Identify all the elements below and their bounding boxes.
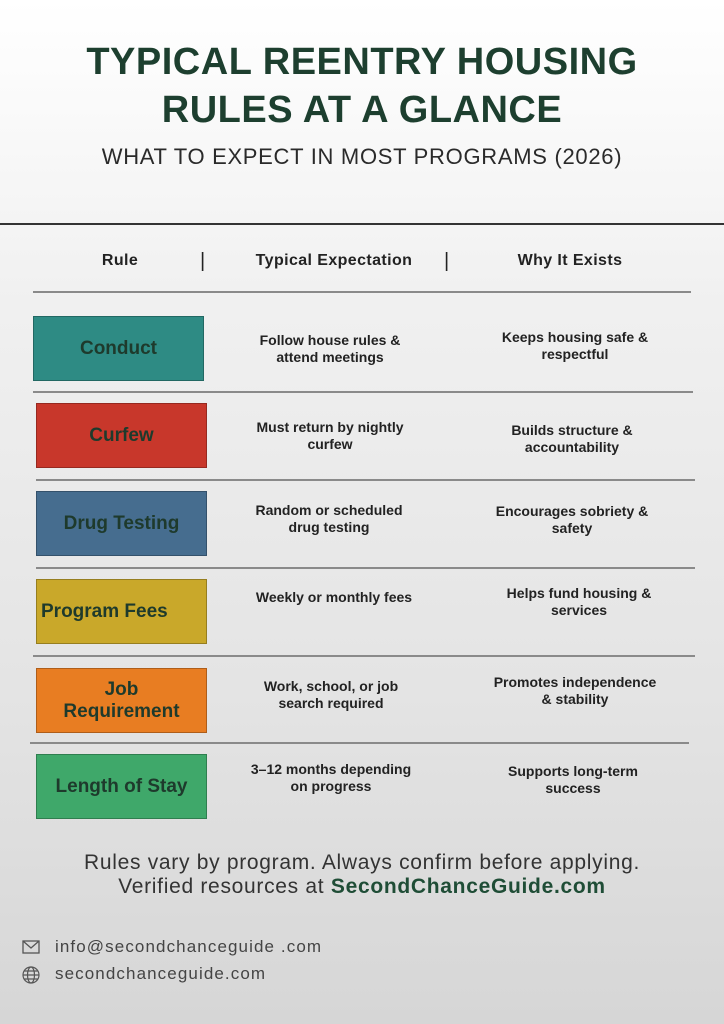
row: curfew: Curfew — [89, 424, 154, 446]
row: drug testing: safety — [552, 520, 592, 536]
title — [86, 41, 638, 131]
row: curfew — [36, 403, 633, 468]
row: length of stay: success — [545, 780, 601, 796]
table header: Why It Exists — [518, 252, 622, 269]
row: length of stay: Length of Stay — [56, 776, 187, 796]
title: TYPICAL REENTRY HOUSING — [86, 41, 638, 83]
footer note: Verified resources at SecondChanceGuide.com — [118, 875, 606, 898]
row: conduct — [33, 316, 648, 381]
row: length of stay: 3–12 months depending — [251, 761, 411, 777]
table header: | — [444, 250, 450, 272]
row: curfew: accountability — [525, 439, 619, 455]
row: program fees: Program Fees — [41, 600, 168, 622]
row: job requirement — [36, 668, 656, 733]
row: program fees: Weekly or monthly fees — [256, 589, 412, 605]
row: length of stay: on progress — [291, 778, 371, 794]
icon: envelope — [22, 940, 40, 954]
footer note: Rules vary by program. Always confirm before applying. — [84, 851, 640, 874]
table header: | — [200, 250, 206, 272]
row: program fees: services — [551, 602, 607, 618]
row: conduct: respectful — [542, 346, 608, 362]
row: conduct: Keeps housing safe & — [502, 329, 648, 345]
row: job requirement: Promotes independence — [494, 674, 656, 690]
row: curfew: Builds structure & — [511, 422, 633, 438]
row: drug testing: Encourages sobriety & — [496, 503, 648, 519]
row: program fees — [36, 579, 651, 644]
row: job requirement: & stability — [542, 691, 608, 707]
contact: website: secondchanceguide.com — [55, 964, 266, 983]
icon: globe — [22, 966, 40, 984]
row: curfew: curfew — [307, 436, 353, 452]
row: curfew: Must return by nightly — [256, 419, 404, 435]
title: RULES AT A GLANCE — [162, 89, 562, 131]
table header: Typical Expectation — [256, 252, 412, 269]
footer note — [84, 851, 640, 898]
row: drug testing: Random or scheduled — [255, 502, 403, 518]
table header: Rule — [102, 252, 138, 269]
row: job requirement: Requirement — [63, 700, 180, 722]
row: job requirement: search required — [278, 695, 384, 711]
row: length of stay — [36, 754, 638, 819]
contact: email: info@secondchanceguide .com — [55, 937, 322, 956]
row: drug testing: Drug Testing — [64, 512, 179, 534]
row: length of stay: Supports long-term — [508, 763, 638, 779]
row: job requirement: Job — [105, 678, 138, 700]
row: drug testing — [36, 491, 648, 556]
row: conduct: attend meetings — [276, 349, 384, 365]
row: conduct: Conduct — [80, 338, 157, 358]
table header — [102, 250, 622, 272]
subtitle: WHAT TO EXPECT IN MOST PROGRAMS (2026) — [102, 144, 622, 169]
row: job requirement: Work, school, or job — [264, 678, 398, 694]
row: drug testing: drug testing — [289, 519, 369, 535]
row: conduct: Follow house rules & — [260, 332, 400, 348]
row: program fees: Helps fund housing & — [507, 585, 651, 601]
